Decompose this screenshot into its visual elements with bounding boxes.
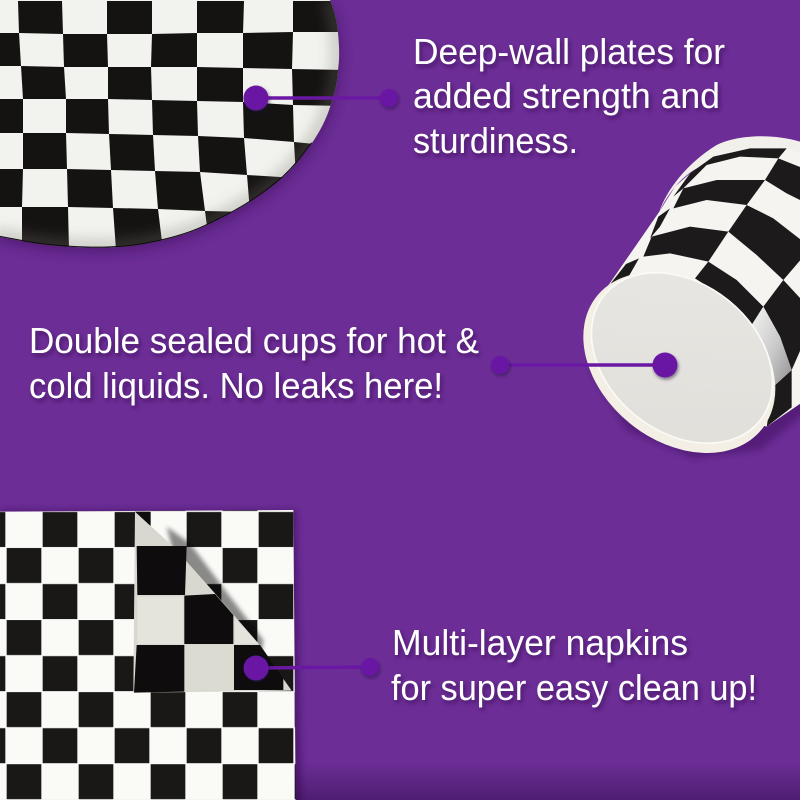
- cup caption: Double sealed cups for hot &: [29, 320, 479, 361]
- plate caption: sturdiness.: [413, 120, 578, 161]
- folded napkin corner: [133, 512, 292, 693]
- napkin callout: [244, 656, 379, 680]
- plate caption: added strength and: [413, 75, 720, 116]
- plate caption: Deep-wall plates for: [413, 31, 725, 72]
- napkin caption: [391, 622, 757, 708]
- plate caption: [413, 31, 725, 161]
- bottom edge shading: [0, 762, 800, 800]
- cup caption: cold liquids. No leaks here!: [29, 365, 443, 406]
- plate image: [0, 0, 345, 255]
- cup image: [548, 136, 800, 490]
- napkin caption: Multi-layer napkins: [392, 622, 688, 663]
- cup callout: [491, 352, 678, 378]
- plate callout: [244, 86, 398, 110]
- napkin image: [0, 510, 302, 800]
- napkin caption: for super easy clean up!: [391, 667, 757, 708]
- flap shadow: [167, 527, 263, 653]
- cup caption: [29, 320, 479, 406]
